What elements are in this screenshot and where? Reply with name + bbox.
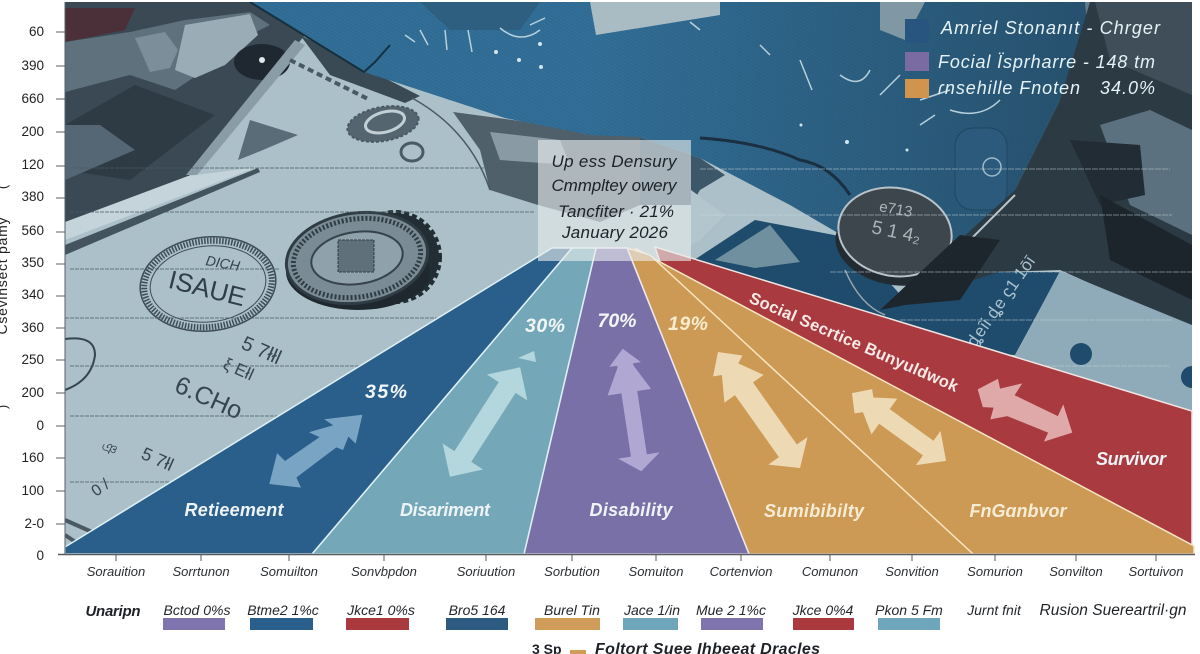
metal tag with numbers bbox=[829, 179, 1015, 315]
legend text bbox=[938, 18, 1161, 98]
legend labels bbox=[164, 602, 1186, 619]
denim fabric bbox=[250, 2, 1100, 260]
money paper base bbox=[66, 2, 1092, 546]
x axis labels: Sorbution bbox=[544, 564, 600, 579]
y axis numbers: 390 bbox=[21, 58, 44, 73]
wedge category labels: Disariment bbox=[400, 500, 491, 520]
y axis numbers: 200 bbox=[21, 385, 44, 400]
arrow: fnganbvor bbox=[839, 375, 959, 479]
percentage labels: 19% bbox=[668, 313, 708, 335]
legend swatches bbox=[163, 618, 940, 630]
arrow: disability bbox=[601, 345, 663, 475]
x axis labels: Sonvition bbox=[885, 564, 939, 579]
printed notes on paper bbox=[65, 332, 284, 545]
x axis labels: Somuiton bbox=[629, 564, 683, 579]
panel text bbox=[552, 152, 678, 242]
legend labels: Pkon 5 Fm bbox=[875, 602, 943, 618]
y axis numbers: 100 bbox=[21, 483, 44, 498]
dark blue note bbox=[691, 220, 1060, 355]
radial wedge chart bbox=[65, 247, 1194, 554]
y axis numbers: 660 bbox=[21, 91, 44, 106]
x axis labels: Sorrtunon bbox=[172, 564, 230, 579]
legend swatch: orange bbox=[905, 79, 929, 98]
printed notes on paper: ঞ bbox=[98, 438, 120, 460]
y axis numbers: 560 bbox=[21, 223, 44, 238]
bottom legend row bbox=[86, 602, 1186, 630]
y axis numbers: 0 bbox=[36, 548, 44, 563]
y axis numbers: 120 bbox=[21, 157, 44, 172]
panel text: Cmmpltey owery bbox=[552, 176, 678, 195]
x axis labels: Sonvbpdon bbox=[351, 564, 417, 579]
wedge: red Survivor bbox=[655, 247, 1192, 546]
legend labels: Jace 1/in bbox=[623, 602, 680, 618]
percentage labels: 35% bbox=[365, 381, 407, 403]
dark portrait banknote bbox=[65, 2, 305, 255]
legend labels: Jkce1 0%s bbox=[346, 602, 415, 618]
percentage labels bbox=[365, 310, 708, 403]
arrow: retirement bbox=[257, 400, 377, 501]
stamp with ISAUE: DICH bbox=[205, 252, 242, 274]
metal tag with numbers: 5 1 4₂ bbox=[870, 217, 923, 248]
top-right legend bbox=[905, 18, 1161, 98]
arrow: survivor bbox=[969, 368, 1082, 453]
x axis labels: Sorauition bbox=[87, 564, 145, 579]
x axis labels: Cortenvion bbox=[710, 564, 772, 579]
stamp with ISAUE: ISAUE bbox=[166, 264, 249, 312]
y axis numbers: 250 bbox=[21, 352, 44, 367]
printed notes on paper: 5 7łłl bbox=[238, 332, 284, 369]
x axis labels: Comunon bbox=[802, 564, 858, 579]
legend labels: Bro5 164 bbox=[449, 602, 506, 618]
legend labels: Btme2 1%c bbox=[247, 602, 319, 618]
y axis numbers: 350 bbox=[21, 255, 44, 270]
percentage labels: 70% bbox=[598, 310, 636, 332]
metal tag with numbers: e713 bbox=[878, 198, 914, 221]
percentage labels: 30% bbox=[525, 315, 565, 337]
wedge category labels: FnGɑnbvor bbox=[970, 501, 1067, 521]
x axis labels: Sonvilton bbox=[1049, 564, 1103, 579]
legend text: Amriel Stonanıt - Chrger bbox=[940, 18, 1161, 38]
wedge: orange right FnGanbvor bbox=[635, 248, 1194, 554]
y axis numbers: 360 bbox=[21, 320, 44, 335]
y axis numbers: 200 bbox=[21, 124, 44, 139]
legend labels: Jurnt fnit bbox=[966, 602, 1022, 618]
wedge category labels: Survivor bbox=[1096, 449, 1167, 469]
printed notes on paper: 0 / bbox=[89, 476, 113, 500]
y axis numbers: 380 bbox=[21, 189, 44, 204]
wedge: blue Retieement bbox=[65, 248, 572, 554]
center info panel bbox=[538, 140, 691, 261]
grid lines light bbox=[700, 169, 1192, 366]
legend swatch: blue bbox=[905, 19, 929, 43]
x axis labels bbox=[87, 564, 1183, 579]
x axis labels: Somurion bbox=[967, 564, 1023, 579]
y axis numbers: 160 bbox=[21, 450, 44, 465]
panel text: Tancfiter · 21% bbox=[558, 202, 674, 221]
legend title: Unaripn bbox=[86, 603, 140, 620]
printed notes on paper: ξ Ełl bbox=[220, 354, 257, 384]
y axis numbers: 2‑0 bbox=[24, 516, 44, 531]
x axis labels: Sortuivon bbox=[1129, 564, 1183, 579]
stamp with ISAUE bbox=[139, 236, 277, 332]
x axis labels: Somuilton bbox=[260, 564, 318, 579]
legend labels: Rusion Suereartril·gn bbox=[1040, 602, 1186, 619]
round seal coin bbox=[280, 204, 439, 312]
printed notes on paper: 6.CHo bbox=[171, 371, 247, 425]
ornate banknote mark bbox=[290, 60, 423, 161]
rotated wedge heading: Social Secrtice Bunyuldwok bbox=[746, 289, 962, 396]
panel text: January 2026 bbox=[561, 223, 669, 242]
dark right banknote bbox=[965, 2, 1192, 325]
wedge category labels: Retieement bbox=[184, 500, 284, 520]
legend text: 34.0% bbox=[1100, 78, 1155, 98]
x axis labels: Soriuution bbox=[457, 564, 515, 579]
legend labels: Mue 2 1%c bbox=[696, 602, 766, 618]
paper arc bbox=[412, 98, 490, 190]
wedge: orange Sumibibilty bbox=[627, 248, 973, 554]
wedge category labels: Disability bbox=[590, 500, 673, 520]
x axis bbox=[58, 554, 1195, 579]
panel text: Up ess Densury bbox=[552, 152, 678, 171]
y axis numbers: 0 bbox=[36, 418, 44, 433]
printed notes on paper: 5 7łl bbox=[138, 443, 177, 475]
wedge: teal Disariment bbox=[312, 248, 596, 554]
grid lines bbox=[65, 168, 555, 482]
y axis bbox=[0, 2, 65, 563]
legend labels: Bctod 0%s bbox=[164, 602, 230, 618]
background photo collage bbox=[65, 2, 1200, 554]
arrow: disariment bbox=[430, 351, 540, 490]
pale paper right of panel bbox=[691, 190, 725, 245]
legend labels: Burel Tin bbox=[544, 602, 600, 618]
wedge category labels: Sumibibilty bbox=[764, 501, 865, 521]
legend text: ɾnsehille Fnoten bbox=[938, 78, 1080, 98]
legend text: Focial Ïsprharre - 148 tm bbox=[938, 52, 1155, 72]
arrow: sumibibilty bbox=[698, 338, 820, 482]
pale paper with dots bbox=[1015, 271, 1200, 412]
dark shadow region beside panel bbox=[300, 35, 725, 222]
legend swatch: purple bbox=[905, 52, 929, 71]
y axis numbers: 60 bbox=[29, 24, 44, 39]
blue note script: ȡeȋi ȡe ϛ1 1ōī bbox=[963, 252, 1039, 350]
y axis numbers: 340 bbox=[21, 287, 44, 302]
wedge: purple Disability bbox=[524, 248, 749, 554]
wedge category labels bbox=[184, 449, 1167, 521]
legend labels: Jkce 0%4 bbox=[792, 602, 854, 618]
y axis numbers bbox=[21, 24, 44, 563]
